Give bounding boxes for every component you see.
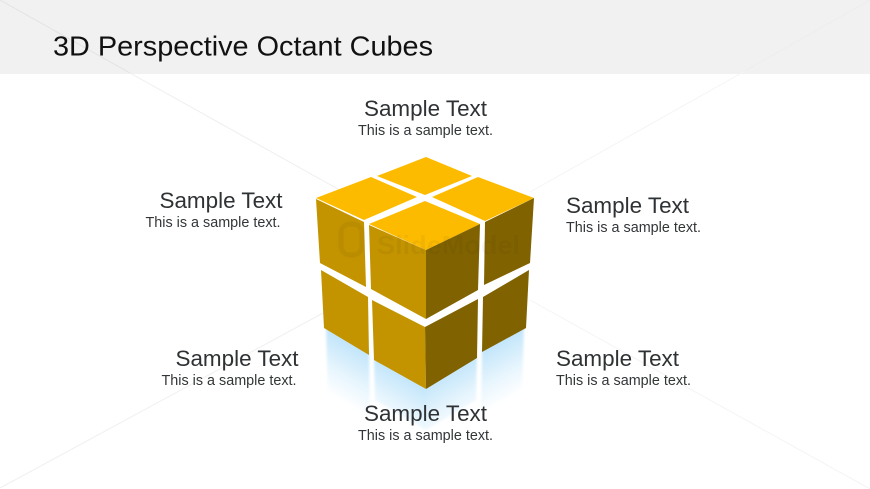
right faces: [425, 198, 534, 389]
label: bottom: This is a sample text.: [358, 428, 493, 444]
left faces: [316, 199, 426, 389]
title: 3D Perspective Octant Cubes: [53, 30, 433, 62]
watermark: SlideModel: [377, 230, 520, 260]
label: lower left: [162, 346, 298, 389]
label: lower left: This is a sample text.: [162, 373, 296, 389]
title band: [0, 0, 870, 74]
label: lower right: Sample Text: [556, 346, 679, 371]
watermark: [341, 224, 520, 260]
label: top: Sample Text: [364, 96, 487, 121]
label: top: This is a sample text.: [358, 123, 493, 139]
label: upper left: This is a sample text.: [146, 215, 280, 231]
octant cube: [316, 157, 534, 389]
label: lower left: Sample Text: [176, 346, 298, 371]
label: upper right: Sample Text: [566, 193, 689, 218]
label: upper right: This is a sample text.: [566, 220, 701, 236]
label: upper left: Sample Text: [160, 188, 282, 213]
label: upper left: [146, 188, 282, 231]
top faces: [316, 157, 534, 250]
label: bottom: [358, 401, 493, 444]
cube reflection: [326, 326, 524, 430]
label: lower right: [556, 346, 691, 389]
label: lower right: This is a sample text.: [556, 373, 691, 389]
label: upper right: [566, 193, 701, 236]
label: bottom: Sample Text: [364, 401, 487, 426]
label: top: [358, 96, 493, 139]
